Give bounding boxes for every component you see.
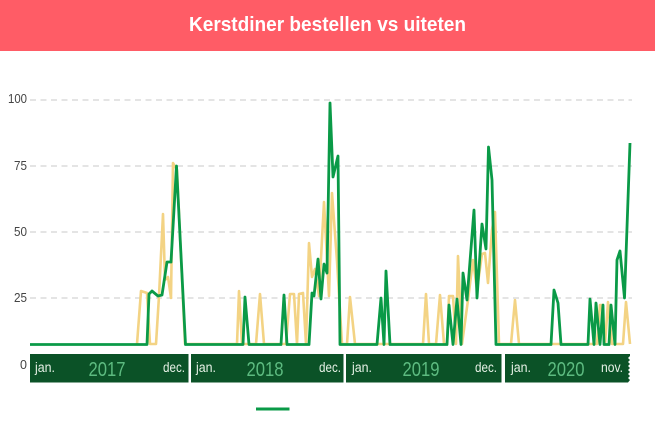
y axis labels: 25 xyxy=(14,291,27,305)
title banner xyxy=(0,0,655,51)
legend line xyxy=(256,408,290,410)
timeline bar 2018: 2018 xyxy=(246,359,284,381)
timeline bar 2019: dec. xyxy=(475,360,497,375)
timeline bar 2019 xyxy=(346,354,502,382)
y axis labels: 0 xyxy=(20,358,27,372)
timeline bar 2017: jan. xyxy=(34,360,55,375)
line: uiteten (green) xyxy=(30,103,630,344)
title: Kerstdiner bestellen vs uiteten xyxy=(189,14,466,36)
y axis labels: 75 xyxy=(14,159,27,173)
y axis labels xyxy=(8,92,27,372)
timeline bar 2020: jan. xyxy=(510,360,531,375)
timeline bar 2019: 2019 xyxy=(402,359,440,381)
y axis labels: 100 xyxy=(8,92,27,106)
y axis labels: 50 xyxy=(14,225,27,239)
line: bestellen (gold) xyxy=(137,163,630,344)
timeline bar 2020: 2020 xyxy=(548,359,584,381)
timeline bar 2017 xyxy=(30,354,188,382)
timeline bar 2020: nov. xyxy=(601,360,623,375)
timeline bar 2017: 2017 xyxy=(88,359,126,381)
timeline bar 2019: jan. xyxy=(351,360,372,375)
timeline bar 2018: dec. xyxy=(319,360,341,375)
timeline bar 2018: jan. xyxy=(195,360,216,375)
timeline bar 2017: dec. xyxy=(163,360,185,375)
timeline bar 2020 xyxy=(505,354,630,382)
timeline bar 2018 xyxy=(191,354,344,382)
